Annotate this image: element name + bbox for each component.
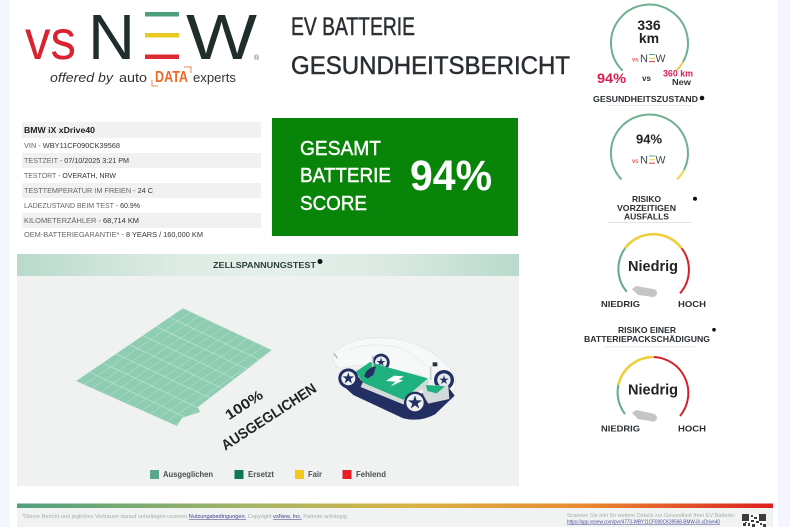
- gauge: state of health range: 336: [637, 17, 661, 33]
- title: [291, 13, 570, 80]
- footer: *Dieser Bericht und jegliches Vertrauen darauf unterliegen unseren Nutzungsbedingungen. Copyright vsNew, Inc. Patente anhängig: [22, 514, 347, 520]
- needle: [632, 286, 657, 297]
- panel: vehicle info table: BMW iX xDrive40: [24, 126, 96, 135]
- logo: vsNEW: W: [186, 1, 258, 73]
- mini logo: W: [656, 53, 666, 65]
- mini logo: vs: [632, 158, 639, 165]
- panel: overall battery score: [272, 118, 518, 236]
- gauge: early failure risk: VORZEITIGEN: [617, 203, 676, 213]
- mini logo: N: [640, 53, 648, 65]
- gauge: state of health range: GESUNDHEITSZUSTAND: [593, 94, 698, 104]
- panel: cell voltage test: [17, 254, 519, 486]
- panel header: [17, 254, 519, 276]
- rotated label: 100% balanced: 100%: [222, 386, 266, 423]
- heading: battery pack damage risk: BATTERIEPACKSCHÄDIGUNG: [584, 334, 710, 344]
- panel: vehicle info table: [22, 122, 261, 239]
- footer: [17, 504, 773, 527]
- panel: vehicle info table: LADEZUSTAND BEIM TEST - 60.9%: [24, 201, 141, 210]
- gauge: state of health range: vs: [642, 74, 652, 83]
- needle: [632, 410, 657, 422]
- gauge: early failure risk: RISIKO: [632, 194, 661, 204]
- legend: Fehlend: [356, 470, 386, 479]
- mini logo: N: [640, 154, 648, 166]
- gauge: premature failure risk level: Niedrig: [628, 258, 678, 275]
- heading: battery pack damage risk: [584, 325, 716, 347]
- footer: https://app.vsnew.com/pvr/4773-WBY11CF090CK39568-BMW-iX-xDrive40: [567, 520, 720, 526]
- heading: battery pack damage risk: RISIKO EINER: [618, 325, 676, 335]
- panel: overall battery score: SCORE: [300, 193, 367, 215]
- mini logo: W: [656, 154, 666, 166]
- gauge: premature failure risk level: [601, 234, 706, 309]
- panel: vehicle info table: TESTORT - OVERATH, NRW: [24, 171, 116, 180]
- gauge: early failure risk: 94%: [636, 132, 662, 146]
- panel: vehicle info table: VIN - WBY11CF090CK39568: [24, 141, 120, 150]
- title: EV BATTERIE: [291, 13, 415, 41]
- title: GESUNDHEITSBERICHT: [291, 52, 570, 80]
- panel header: ZELLSPANNUNGSTEST: [213, 260, 317, 270]
- logo: vsNEW: ®: [254, 54, 260, 62]
- logo: vsNEW: N: [88, 1, 135, 73]
- gauge: battery pack damage risk level: [601, 357, 706, 434]
- panel: overall battery score: BATTERIE: [300, 165, 391, 187]
- footer: Scannen Sie hier für weitere Details zur Gesundheit Ihrer EV Batterie:: [567, 513, 735, 519]
- mini logo: [632, 53, 666, 65]
- gauge: state of health range: km: [639, 30, 659, 46]
- gauge: state of health range: 94%: [597, 70, 627, 86]
- gauge: state of health range: 360 km: [663, 68, 693, 78]
- panel: vehicle info table: TESTTEMPERATUR IM FREIEN - 24 C: [24, 186, 153, 195]
- rotated label: 100% balanced: AUSGEGLICHEN: [219, 381, 320, 454]
- gauge: battery pack damage risk level: HOCH: [678, 424, 706, 434]
- gauge: early failure risk: [608, 115, 697, 223]
- gauge: state of health range: [593, 5, 704, 106]
- logo: vsNEW: experts: [193, 71, 236, 85]
- gauge: state of health range: New: [672, 77, 691, 87]
- logo: vsNEW: vs: [25, 8, 76, 71]
- panel: overall battery score: GESAMT: [300, 138, 381, 160]
- logo: vsNEW: offered by: [50, 71, 114, 85]
- gauge: battery pack damage risk level: Niedrig: [628, 382, 678, 398]
- legend: Ausgeglichen: [163, 470, 213, 479]
- gauge: early failure risk: AUSFALLS: [624, 212, 669, 222]
- car chassis illustration: [333, 338, 456, 420]
- QR code: [742, 514, 766, 527]
- legend: Ersetzt: [248, 470, 274, 479]
- panel: overall battery score: 94%: [410, 152, 492, 200]
- gauge: premature failure risk level: HOCH: [678, 299, 706, 309]
- rotated label: 100% balanced: [205, 360, 320, 454]
- battery cell grid: [76, 308, 272, 426]
- legend: Fair: [308, 470, 322, 479]
- legend: [150, 470, 386, 479]
- gauge: battery pack damage risk level: NIEDRIG: [601, 424, 640, 434]
- logo: vsNEW: DATA: [155, 69, 188, 86]
- panel: vehicle info table: TESTZEIT - 07/10/2025 3:21 PM: [24, 156, 129, 165]
- logo: vsNEW: auto: [119, 71, 147, 85]
- panel: vehicle info table: OEM-BATTERIEGARANTIE* - 8 YEARS / 160,000 KM: [24, 230, 203, 239]
- gauge: premature failure risk level: NIEDRIG: [601, 299, 640, 309]
- mini logo: [632, 154, 666, 166]
- logo: vsNEW: [25, 1, 260, 86]
- panel: vehicle info table: KILOMETERZÄHLER - 68,714 KM: [24, 216, 139, 225]
- mini logo: vs: [632, 56, 639, 64]
